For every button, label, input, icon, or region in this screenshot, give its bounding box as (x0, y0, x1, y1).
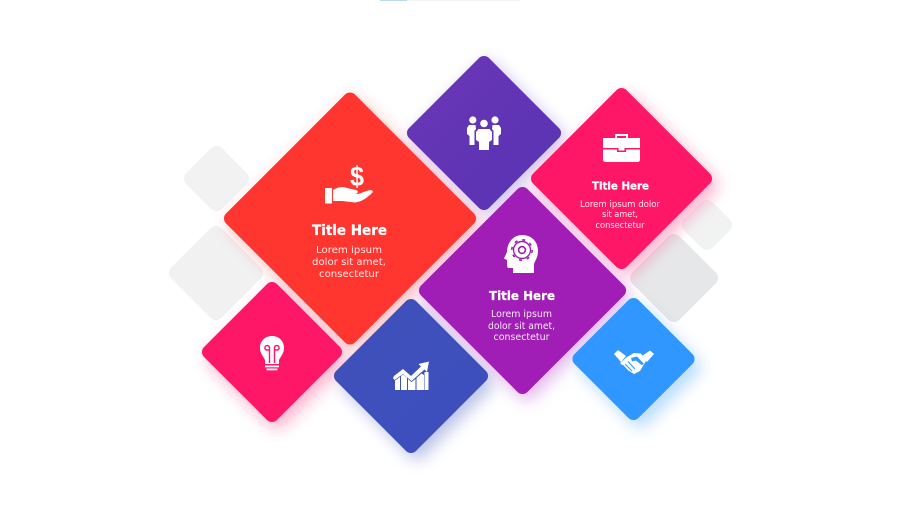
heading: violet title: Title Here (489, 288, 555, 303)
text block: red body: consectetur (319, 269, 379, 280)
icon: briefcase (603, 134, 640, 162)
text block: pink body: consectetur (596, 221, 645, 231)
text block: red body (312, 245, 386, 280)
icon: hand holding dollar: $ (350, 161, 364, 192)
grey diamond: left large (166, 223, 266, 323)
panel: pink diamond with briefcase icon (528, 85, 715, 272)
heading: pink title: Title Here (592, 180, 649, 192)
icon: team of three people (467, 116, 501, 150)
panel: indigo diamond with growth chart icon (331, 296, 491, 456)
text block: pink body (580, 200, 661, 231)
icon: light bulb (260, 336, 284, 370)
grey diamond: right large (627, 231, 721, 325)
panel: red diamond with money icon (221, 90, 479, 347)
icon: growth chart with arrow (393, 362, 429, 390)
text block: pink body: Lorem ipsum dolor (580, 200, 661, 210)
text block: violet body: Lorem ipsum (491, 309, 552, 320)
icon: hand holding dollar (325, 161, 373, 204)
grey diamond: upper left small (181, 143, 252, 214)
panel: violet diamond with head and gear icon (416, 184, 629, 397)
icon: handshake (614, 350, 654, 374)
text block: violet body: dolor sit amet, (488, 321, 555, 332)
icon: head with gear (504, 235, 538, 273)
text block: pink body: sit amet, (602, 210, 638, 220)
text block: red body: Lorem ipsum (316, 245, 382, 256)
text block: violet body: consectetur (494, 332, 550, 343)
panel: purple diamond with team icon (404, 53, 564, 213)
text block: red body: dolor sit amet, (312, 257, 386, 268)
heading: red title: Title Here (312, 223, 387, 239)
panel: blue diamond with handshake icon (570, 295, 697, 423)
panel: pink diamond with light bulb icon (199, 279, 345, 425)
grey diamond: right small (679, 197, 735, 253)
text block: violet body (488, 309, 555, 343)
